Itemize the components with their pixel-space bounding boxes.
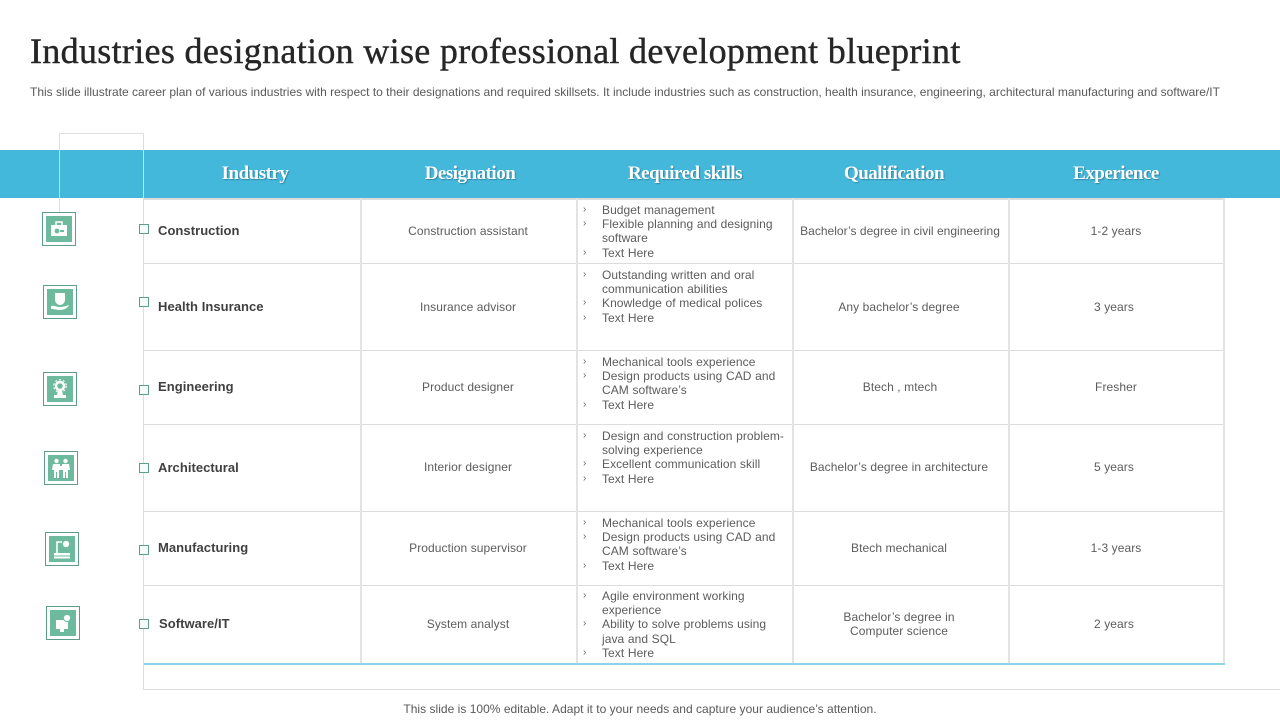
- skills: software: ›: [583, 647, 586, 658]
- skills: manufacturing: ›: [583, 560, 586, 571]
- skills: engineering: ›: [583, 370, 586, 381]
- icon: architectural two people: [44, 451, 78, 485]
- qualification: civil engineering: Bachelor’s degree in civil engineering: [800, 224, 1000, 238]
- skills: engineering: Text Here: [602, 398, 654, 412]
- skills: manufacturing: Mechanical tools experience: [602, 516, 755, 530]
- skills: architectural: ›: [583, 473, 586, 484]
- experience: 5 years: 5 years: [1094, 460, 1134, 474]
- skills: software: ›: [583, 618, 586, 629]
- row label: Architectural: Architectural: [158, 460, 239, 475]
- row label: Health Insurance: Health Insurance: [158, 299, 264, 314]
- skills: construction: ›: [583, 247, 586, 258]
- title: Industries designation wise professional development blueprint: [30, 31, 961, 71]
- vertical timeline line: [143, 133, 144, 690]
- marker: manufacturing: [139, 545, 149, 555]
- subtitle description: This slide illustrate career plan of various industries with respect to their designations and required skillsets. It include industries such as construction, health insurance, engineering, architectural manufacturing and software/IT: [30, 85, 1220, 99]
- marker: software: [139, 619, 149, 629]
- skills: construction: Flexible planning and designing: [602, 217, 773, 231]
- skills: software: [583, 589, 766, 660]
- qualification: Btech mechanical: Btech mechanical: [851, 541, 947, 555]
- skills: architectural: Text Here: [602, 472, 654, 486]
- table grid: [144, 198, 1225, 665]
- row label: Software/IT: Software/IT: [159, 616, 230, 631]
- skills: health insurance: ›: [583, 269, 586, 280]
- marker: engineering: [139, 385, 149, 395]
- column header: Required skills: Required skills: [628, 163, 742, 184]
- skills: construction: Budget management: [602, 203, 715, 217]
- skills: engineering: ›: [583, 356, 586, 367]
- skills: construction: Text Here: [602, 246, 654, 260]
- experience: 2 years: 2 years: [1094, 617, 1134, 631]
- skills: construction: software: [602, 231, 648, 245]
- skills: health insurance: ›: [583, 297, 586, 308]
- qualification: computer science: [843, 610, 955, 638]
- skills: manufacturing: Design products using CAD and: [602, 530, 775, 544]
- skills: architectural: Excellent communication skill: [602, 457, 760, 471]
- skills: software: java and SQL: [602, 632, 676, 646]
- frame connector lines: [59, 133, 144, 212]
- skills: construction: ›: [583, 218, 586, 229]
- qualification: computer science: Bachelor’s degree in: [843, 610, 955, 624]
- skills: health insurance: Outstanding written and oral: [602, 268, 754, 282]
- skills: architectural: solving experience: [602, 443, 703, 457]
- row label: Construction: Construction: [158, 223, 239, 238]
- qualification: computer science: Computer science: [850, 624, 948, 638]
- qualification: any bachelor's: Any bachelor’s degree: [838, 300, 960, 314]
- header band: [0, 150, 1280, 198]
- skills: architectural: [583, 429, 784, 486]
- skills: engineering: CAM software’s: [602, 383, 687, 397]
- skills: health insurance: Text Here: [602, 311, 654, 325]
- skills: software: experience: [602, 603, 661, 617]
- column header: Industry: Industry: [222, 163, 288, 184]
- skills: software: Text Here: [602, 646, 654, 660]
- designation: Insurance advisor: Insurance advisor: [420, 300, 516, 314]
- skills: engineering: ›: [583, 399, 586, 410]
- skills: manufacturing: [583, 516, 775, 573]
- icon: manufacturing robot arm: [45, 532, 79, 566]
- marker: construction: [139, 224, 149, 234]
- marker: health insurance: [139, 297, 149, 307]
- skills: manufacturing: Text Here: [602, 559, 654, 573]
- skills: software: Agile environment working: [602, 589, 745, 603]
- designation: Product designer: Product designer: [422, 380, 514, 394]
- skills: architectural: ›: [583, 458, 586, 469]
- experience: 1-3 years: 1-3 years: [1091, 541, 1141, 555]
- skills: manufacturing: ›: [583, 517, 586, 528]
- designation: Interior designer: Interior designer: [424, 460, 512, 474]
- skills: engineering: [583, 355, 775, 412]
- skills: construction: [583, 203, 773, 260]
- skills: manufacturing: ›: [583, 531, 586, 542]
- column header: Designation: Designation: [425, 163, 515, 184]
- icon: engineering gear: [43, 372, 77, 406]
- skills: health insurance: communication abilities: [602, 282, 728, 296]
- skills: engineering: Mechanical tools experience: [602, 355, 755, 369]
- bottom rule: [143, 689, 1280, 690]
- qualification: architecture: Bachelor’s degree in architecture: [810, 460, 988, 474]
- qualification: Btech, mtech: Btech , mtech: [863, 380, 937, 394]
- column header: Qualification: Qualification: [844, 163, 944, 184]
- column header: Experience: Experience: [1073, 163, 1159, 184]
- icon: health insurance hand and shield: [43, 285, 77, 319]
- skills: construction: ›: [583, 204, 586, 215]
- icon: software monitor and gear: [46, 606, 80, 640]
- row label: Engineering: Engineering: [158, 379, 234, 394]
- row label: Manufacturing: Manufacturing: [158, 540, 248, 555]
- designation: Production supervisor: Production supervisor: [409, 541, 527, 555]
- experience: 3 years: 3 years: [1094, 300, 1134, 314]
- icon: construction toolbox: [42, 212, 76, 246]
- skills: health insurance: [583, 268, 762, 325]
- experience: 1-2 years: 1-2 years: [1091, 224, 1141, 238]
- designation: System analyst: System analyst: [427, 617, 509, 631]
- skills: architectural: ›: [583, 430, 586, 441]
- skills: manufacturing: CAM software’s: [602, 544, 687, 558]
- skills: health insurance: ›: [583, 312, 586, 323]
- designation: Construction assistant: Construction assistant: [408, 224, 528, 238]
- skills: engineering: Design products using CAD and: [602, 369, 775, 383]
- experience: Fresher: Fresher: [1095, 380, 1137, 394]
- skills: software: Ability to solve problems using: [602, 617, 766, 631]
- skills: health insurance: Knowledge of medical polices: [602, 296, 762, 310]
- skills: software: ›: [583, 590, 586, 601]
- marker: architectural: [139, 463, 149, 473]
- skills: architectural: Design and construction problem-: [602, 429, 784, 443]
- footer note: This slide is 100% editable. Adapt it to your needs and capture your audience’s attention.: [403, 702, 877, 716]
